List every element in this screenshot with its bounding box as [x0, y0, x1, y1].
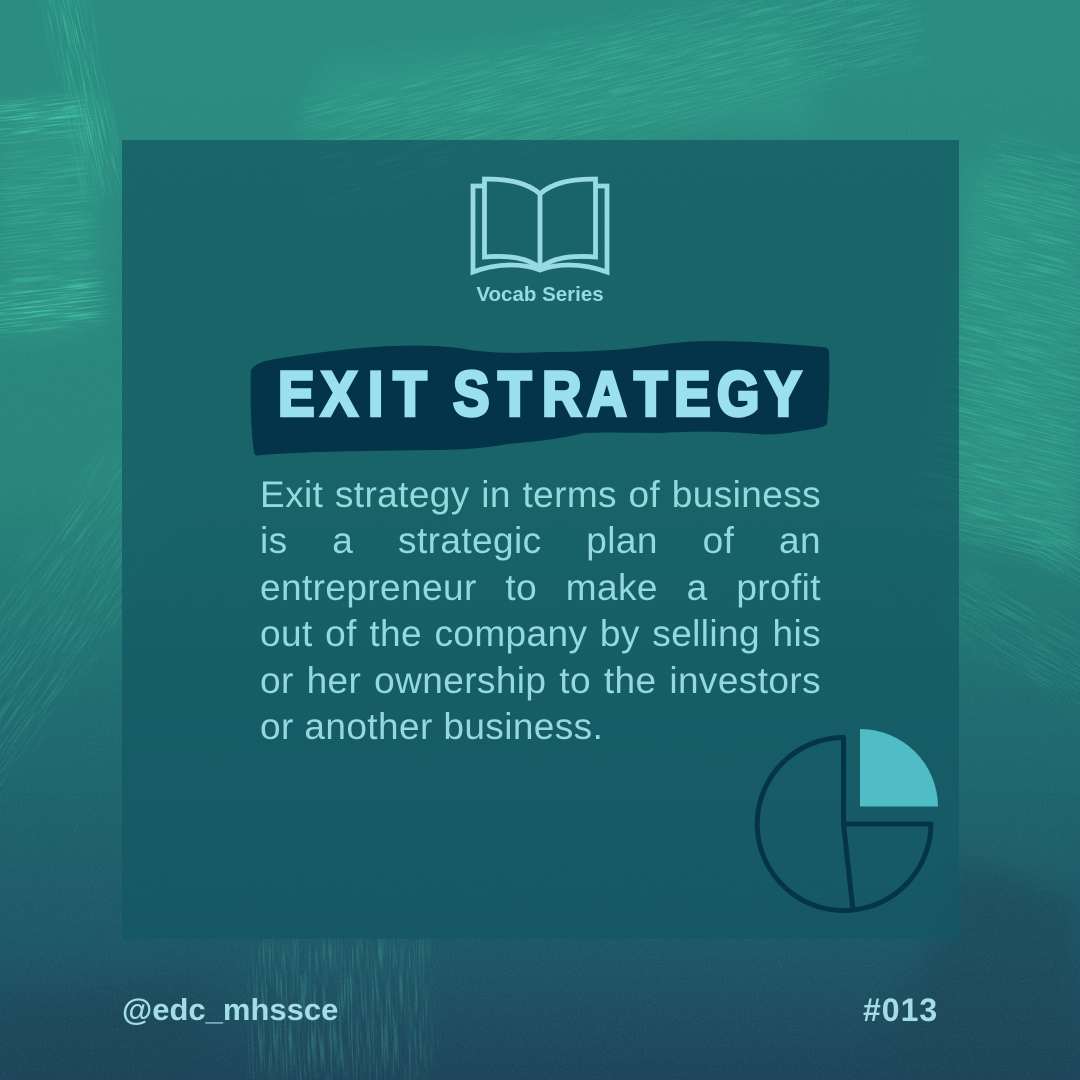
text block: definition: Exit strategy in terms of business — [260, 474, 821, 515]
handle: @edc_mhssce — [122, 992, 338, 1027]
text block: definition: is a strategic plan of an — [260, 520, 821, 561]
chalk streaks, left — [0, 96, 108, 333]
panel: definition card — [122, 140, 959, 939]
chalk streaks, top-left vertical — [40, 0, 124, 196]
chalk streaks, top — [297, 0, 925, 211]
chalk streaks, lower left — [0, 440, 199, 831]
chalk streaks, right edge — [932, 494, 1080, 724]
banner brush shape — [251, 341, 829, 456]
icon: pie chart — [754, 729, 938, 913]
title: Exit Strategy banner — [240, 341, 830, 456]
text block: definition: entrepreneur to make a profit — [260, 567, 821, 608]
chalk streaks, bottom vertical — [248, 937, 432, 1080]
label: Vocab Series: Vocab Series — [476, 283, 604, 306]
text block: definition — [260, 474, 821, 747]
chalk streaks, right — [899, 138, 1080, 567]
pie outline slices — [757, 738, 931, 910]
icon: open book — [470, 176, 610, 276]
pie highlighted slice — [860, 729, 938, 806]
text block: definition: out of the company by selling his — [260, 613, 821, 654]
text block: definition: or another business. — [260, 706, 603, 747]
issue number: #013 — [863, 992, 938, 1028]
text block: definition: or her ownership to the investors — [260, 660, 821, 701]
